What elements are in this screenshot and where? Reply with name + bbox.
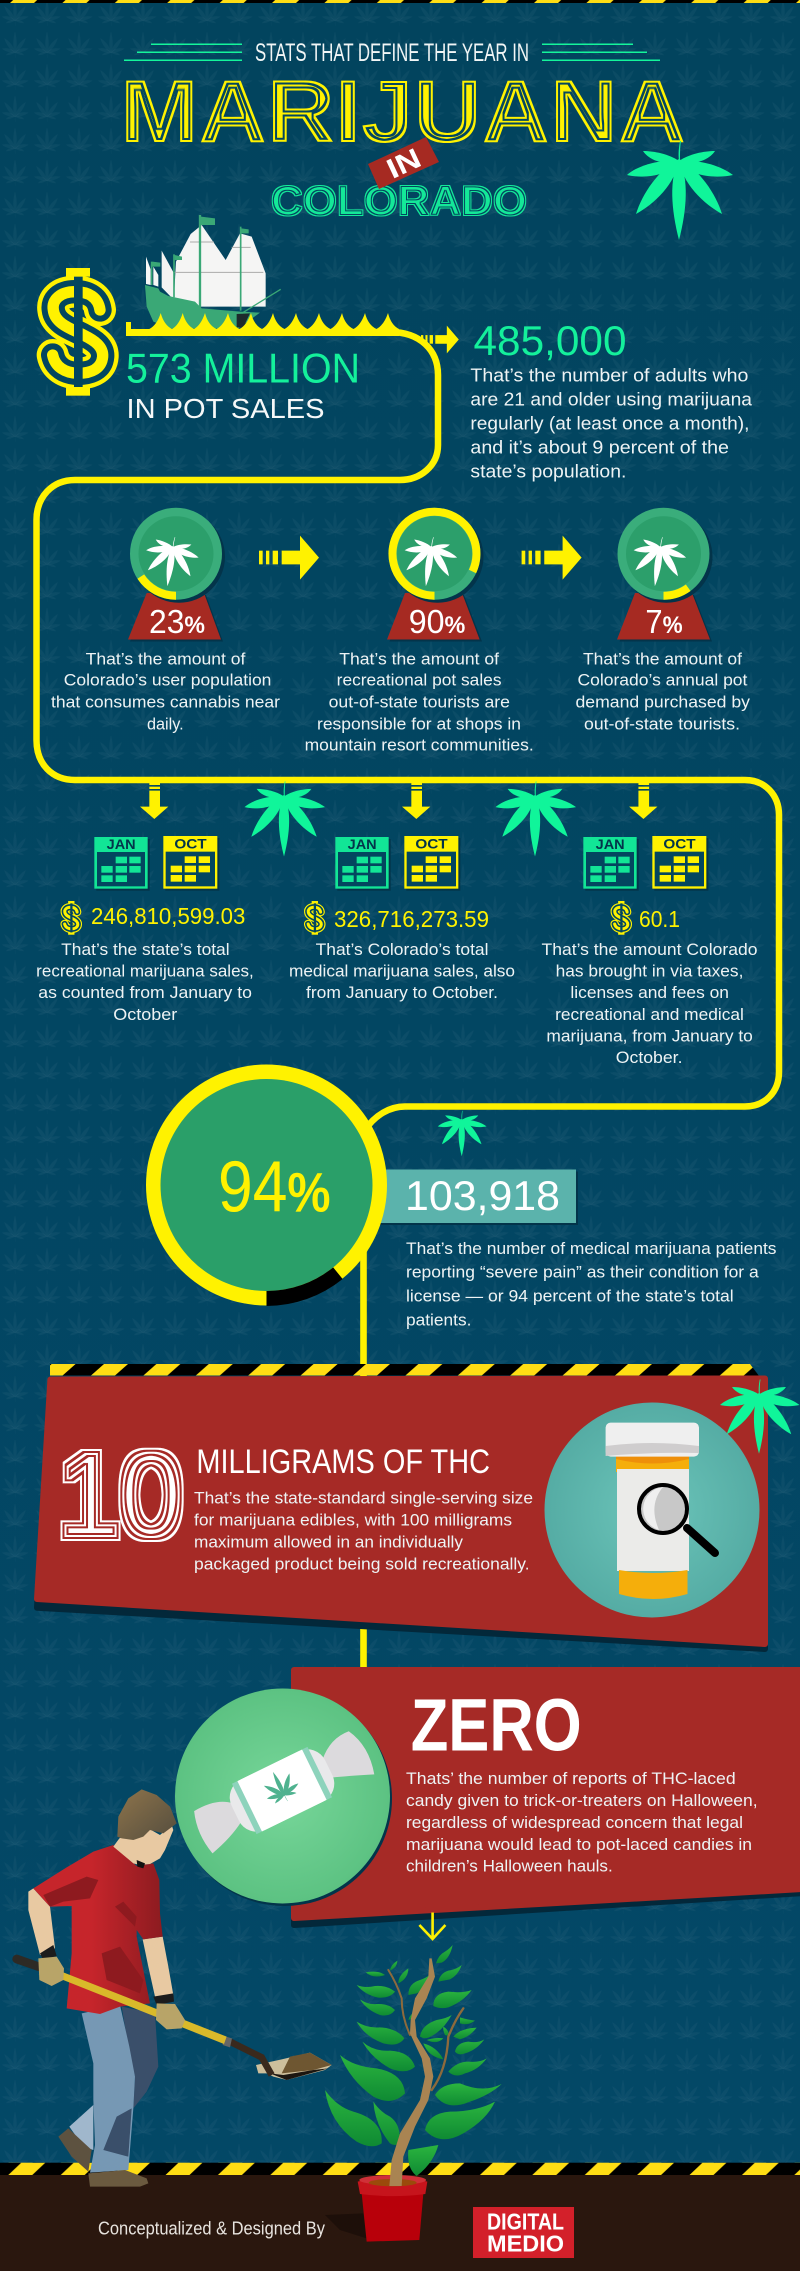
text: 103,918 caption: reporting “severe pain” as their condition for a: [406, 1263, 759, 1282]
stat: medical sales: That’s Colorado’s total: [316, 940, 488, 959]
stat: recreational sales: That’s the state’s total: [61, 940, 230, 959]
stat: 573 million: [126, 345, 360, 424]
arms: [28, 1888, 173, 1997]
text: 103,918 caption: [406, 1239, 776, 1330]
credit text: Conceptualized & Designed By: [98, 2218, 325, 2238]
icon: leaf 2: [244, 781, 325, 857]
icon: pill bottle: [544, 1402, 760, 1618]
chart: 94% donut: [146, 1064, 387, 1306]
icon: panel leaf: [720, 1380, 800, 1454]
panel text: That’s the state-standard single-serving size: [194, 1489, 533, 1508]
shovel: [17, 1959, 332, 2080]
panel text: Thats’ the number of reports of THC-laced: [406, 1769, 736, 1788]
text: 7% caption: out-of-state tourists.: [584, 714, 740, 734]
stat: 485,000: and it’s about 9 percent of the: [470, 438, 729, 458]
flag: in: [368, 137, 439, 189]
plant illustration: [325, 1945, 502, 2242]
calendars: column 2: JAN: [348, 836, 377, 852]
stat: medical sales: from January to October.: [306, 983, 498, 1002]
shoes: [58, 2128, 148, 2187]
stat: medical sales: [289, 901, 515, 1002]
panel text: maximum allowed in an individually: [194, 1532, 463, 1552]
stat: recreational sales: recreational marijuana sales,: [36, 962, 254, 980]
numeral 10: 10: [58, 1430, 182, 1560]
stat: taxes: has brought in via taxes,: [556, 962, 743, 980]
panel text: candy given to trick-or-treaters on Halloween,: [406, 1791, 758, 1810]
text: 7% caption: [576, 650, 751, 734]
calendars: column 1: OCT: [174, 835, 207, 851]
ship illustration: [145, 215, 281, 329]
stat: 485,000: state’s population.: [470, 462, 626, 482]
title: Marijuana: MARIJUANA: [120, 61, 686, 161]
text: 23% caption: That’s the amount of: [86, 650, 246, 668]
logo: Digital Medio: DIGITAL: [487, 2209, 564, 2235]
stat: 573 million: IN POT SALES: [126, 393, 324, 424]
flag: in: IN: [382, 142, 426, 185]
arrow: badge 2 to 3: [522, 536, 582, 580]
stat: 573 million: 573 MILLION: [126, 345, 360, 392]
kicker rules: [124, 44, 660, 60]
badge: 7%: [617, 508, 712, 642]
icon: dollar sign: [53, 268, 103, 396]
calendars: column 1: [94, 835, 219, 891]
text: 90% caption: recreational pot sales: [337, 670, 502, 690]
stat: 485,000: That’s the number of adults who: [470, 366, 748, 386]
man with shovel: [17, 1789, 332, 2187]
gloves: [38, 1945, 185, 2029]
text: 103,918 caption: That’s the number of medical marijuana patients: [406, 1239, 776, 1258]
text: 103,918 caption: license — or 94 percent of the state’s total: [406, 1287, 734, 1306]
text: 90% caption: responsible for at shops in: [317, 714, 521, 734]
panel text: children’s Halloween hauls.: [406, 1857, 613, 1876]
text: 23% caption: [51, 650, 280, 734]
stat: 485,000: are 21 and older using marijuana: [470, 390, 753, 410]
title kicker: STATS THAT DEFINE THE YEAR IN: [255, 39, 529, 67]
arrow: badge 1 to 2: [259, 536, 319, 580]
candy circle: [175, 1688, 392, 1906]
panel heading: MILLIGRAMS OF THC: [196, 1443, 490, 1481]
calendars: column 2: [335, 835, 460, 891]
icon: small leaf: [438, 1111, 487, 1156]
stat: recreational sales: October: [113, 1005, 178, 1024]
stat: recreational sales: [36, 901, 254, 1024]
panel text: marijuana would lead to pot-laced candies in: [406, 1835, 752, 1854]
logo: Digital Medio: [473, 2207, 574, 2258]
panel text: [406, 1769, 758, 1876]
panel text: [194, 1489, 533, 1574]
header: [120, 39, 686, 224]
text: 7% caption: demand purchased by: [576, 693, 751, 712]
badge: 23%: 23%: [149, 603, 205, 640]
stat: taxes: That’s the amount Colorado: [542, 940, 758, 959]
stat: taxes: licenses and fees on: [570, 983, 729, 1002]
text: 23% caption: daily.: [147, 714, 184, 734]
stat: taxes: October.: [616, 1048, 682, 1067]
waves: [126, 313, 399, 336]
text: 7% caption: That’s the amount of: [583, 650, 742, 668]
panel text: regardless of widespread concern that legal: [406, 1813, 743, 1832]
text: 23% caption: that consumes cannabis near: [51, 693, 280, 712]
badge: 7%: 7%: [645, 603, 683, 640]
badge: 90%: [387, 508, 484, 642]
panel: zero: [175, 1670, 800, 1925]
panel text: packaged product being sold recreationally.: [194, 1555, 530, 1574]
panel text: for marijuana edibles, with 100 milligrams: [194, 1510, 512, 1529]
panel heading: zero: ZERO: [411, 1683, 582, 1766]
calendars: column 3: JAN: [596, 836, 625, 852]
stat: recreational sales: as counted from January to: [38, 983, 252, 1002]
calendars: column 1: JAN: [107, 836, 136, 852]
arrow: down 1: [140, 782, 168, 819]
arrow to 485,000: [421, 326, 459, 353]
label box: 103,918: 103,918: [405, 1172, 560, 1219]
logo: Digital Medio: MEDIO: [487, 2231, 564, 2257]
panel: 10 milligrams: [37, 1364, 800, 1649]
stat: taxes: [542, 901, 758, 1067]
stat: recreational sales: 246,810,599.03: [91, 903, 245, 929]
calendars: column 3: [583, 835, 708, 891]
arrow: down 2: [402, 782, 430, 819]
text: 90% caption: out-of-state tourists are: [329, 693, 510, 712]
stat: taxes: marijuana, from January to: [546, 1026, 753, 1046]
badge: 23%: [128, 508, 225, 642]
stat: taxes: 60.1: [639, 906, 680, 932]
stat: medical sales: medical marijuana sales, also: [289, 962, 515, 980]
text: 90% caption: [305, 650, 534, 755]
stat: taxes: recreational and medical: [555, 1005, 744, 1024]
chart: 94% donut: 94%: [218, 1148, 331, 1228]
stat: 485,000: regularly (at least once a month),: [470, 414, 749, 434]
stat: 485,000: [470, 317, 753, 482]
shirt: [33, 1845, 163, 2014]
ground: [0, 2175, 800, 2271]
label box: 103,918: [370, 1170, 578, 1225]
connector line: [36, 332, 779, 1668]
arrow: to plant: [419, 1912, 445, 1939]
text: 90% caption: That’s the amount of: [339, 650, 499, 668]
stat: 485,000: 485,000: [474, 317, 626, 364]
calendars: column 3: OCT: [663, 835, 696, 851]
head: [113, 1789, 177, 1868]
icon: leaf 3: [495, 781, 576, 857]
badge: 90%: 90%: [409, 603, 465, 640]
calendars: column 2: OCT: [415, 835, 448, 851]
text: 7% caption: Colorado’s annual pot: [578, 670, 748, 690]
text: 90% caption: mountain resort communities.: [305, 736, 534, 755]
text: 103,918 caption: patients.: [406, 1310, 471, 1330]
subtitle: Colorado: COLORADO: [271, 177, 527, 224]
icon: large leaf: [627, 141, 733, 240]
jeans: [69, 2005, 158, 2173]
stat: medical sales: 326,716,273.59: [334, 906, 489, 932]
hazard strip: [0, 2163, 800, 2175]
text: 23% caption: Colorado’s user population: [64, 670, 271, 690]
arrow: down 3: [629, 782, 657, 819]
